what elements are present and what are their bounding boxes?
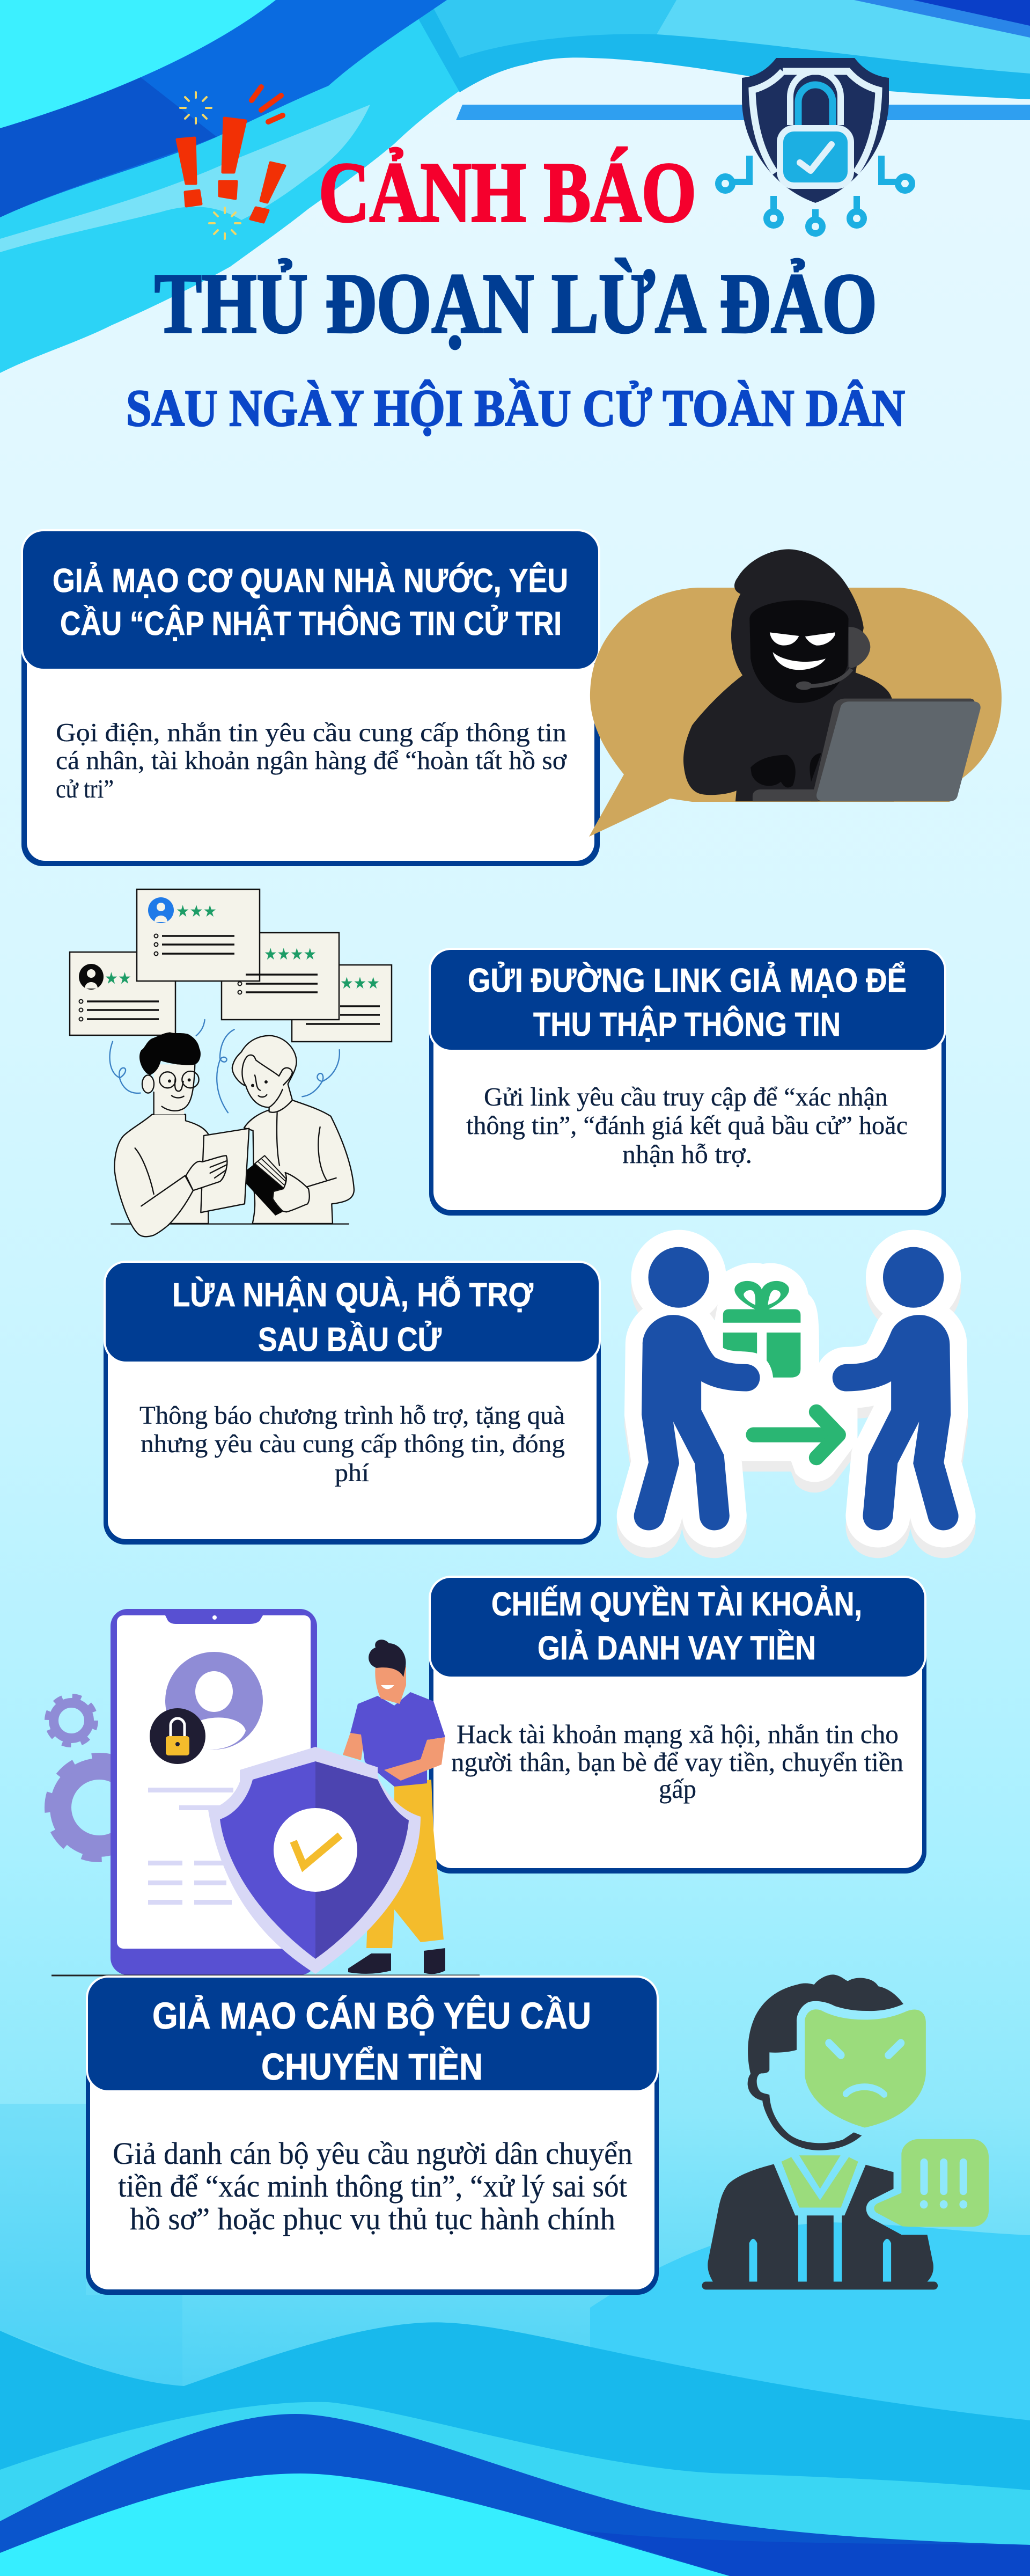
icon: phone, shield and man [48, 1609, 480, 1975]
right person [232, 1036, 354, 1224]
icon: hacker in speech bubble [589, 549, 1002, 837]
card 4 body text [451, 1719, 903, 1804]
card 4 body text: Hack tài khoản mạng xã hội, nhắn tin cho [457, 1719, 899, 1749]
card 4 heading [430, 1577, 925, 1678]
two people [634, 1247, 959, 1530]
padlock badge [150, 1708, 205, 1764]
card 2 body text: thông tin”, “đánh giá kết quả bầu cử” hoăc [466, 1110, 908, 1140]
card 1 body text: cử tri” [56, 774, 114, 803]
card 3 body text: Thông báo chương trình hỗ trợ, tặng quà [139, 1401, 565, 1430]
panel: card 1 [21, 530, 600, 866]
card 4 body text: gấp [659, 1774, 696, 1804]
man [343, 1640, 445, 1974]
card 2 body text: Gửi link yêu cầu truy cập để “xác nhận [484, 1082, 888, 1111]
icon: security shield with padlock [718, 58, 912, 233]
swirls [110, 1020, 340, 1113]
card 1 heading: GIẢ MẠO CƠ QUAN NHÀ NƯỚC, YÊU [53, 562, 568, 599]
card 5 body text [113, 2136, 632, 2236]
card 4 heading: CHIẾM QUYỀN TÀI KHOẢN, [491, 1586, 862, 1623]
card 4 body text: người thân, bạn bè để vay tiền, chuyển tiền [451, 1747, 903, 1777]
panel: card 4 [429, 1577, 926, 1874]
floor line [52, 1975, 480, 1976]
arrow [753, 1412, 838, 1458]
card 5 heading: CHUYỂN TIỀN [261, 2045, 483, 2088]
card 1 heading: CẦU “CẬP NHẬT THÔNG TIN CỬ TRI [60, 605, 562, 642]
card 2 heading [430, 949, 945, 1051]
card 2 body text [466, 1082, 908, 1169]
card 5 heading [87, 1977, 658, 2091]
card 3 body text: nhưng yêu càu cung cấp thông tin, đóng [141, 1430, 565, 1458]
sticker halo [634, 1247, 959, 1530]
panel: card 2 [429, 949, 946, 1216]
card 1 heading [22, 530, 599, 670]
icon: two people reading with review cards: ★★★★ [264, 945, 317, 964]
card 3 heading: SAU BẦU CỬ [258, 1321, 442, 1358]
card 3 body text [139, 1401, 565, 1487]
card 3 body text: phí [335, 1459, 369, 1487]
card 3 heading: LỪA NHẬN QUÀ, HỖ TRỢ [172, 1277, 533, 1314]
icon: two people reading with review cards: ★★★ [176, 902, 217, 921]
panel: card 3 [104, 1262, 601, 1545]
icon: two people reading with review cards: ★★★ [340, 974, 380, 993]
gears [48, 1697, 149, 1857]
card 5 body text: hồ sơ” hoặc phục vụ thủ tục hành chính [130, 2201, 615, 2236]
background waves: bottom [0, 2104, 1030, 2576]
tablet and hand [201, 1129, 249, 1212]
card 2 heading: GỬI ĐƯỜNG LINK GIẢ MẠO ĐỂ [468, 962, 907, 999]
shield [208, 1747, 421, 1974]
card 5 heading: GIẢ MẠO CÁN BỘ YÊU CẦU [152, 1994, 591, 2037]
profile badge [165, 1652, 263, 1750]
subtitle: SAU NGÀY HỘI BẦU CỬ TOÀN DÂN [126, 379, 905, 437]
gift [723, 1281, 800, 1378]
icon: handing over a gift [634, 1247, 959, 1541]
background waves: top [0, 0, 1030, 373]
title: CẢNH BÁO: CẢNH BÁO [319, 144, 696, 240]
card 2 heading: THU THẬP THÔNG TIN [533, 1006, 841, 1043]
text bars on phone [148, 1788, 233, 1905]
left person [114, 1064, 208, 1236]
title: THỦ ĐOẠN LỪA ĐẢO: THỦ ĐOẠN LỪA ĐẢO [154, 255, 877, 351]
review cards [70, 889, 392, 1042]
panel: card 5 [86, 1977, 659, 2295]
card 1 body text: cá nhân, tài khoản ngân hàng để “hoàn tất hồ sơ [56, 745, 567, 775]
icon: two people reading with review cards: ★★ [105, 969, 131, 988]
icon: two people reading with review cards [70, 889, 392, 1236]
card 4 heading: GIẢ DANH VAY TIỀN [538, 1630, 816, 1667]
card 3 heading [105, 1262, 600, 1363]
phone [111, 1609, 317, 1975]
sticker shadow [634, 1257, 959, 1541]
card 5 body text: Giả danh cán bộ yêu cầu người dân chuyển [113, 2136, 632, 2171]
card 2 body text: nhận hỗ trợ. [622, 1139, 752, 1169]
icon: red exclamation marks [177, 87, 285, 239]
icon: fraudster with green mask [702, 1974, 989, 2289]
book and hand [246, 1163, 286, 1216]
card 1 body text [56, 718, 567, 803]
card 1 body text: Gọi điện, nhắn tin yêu cầu cung cấp thông tin [56, 718, 566, 747]
card 5 body text: tiền để “xác minh thông tin”, “xử lý sai sót [118, 2169, 627, 2204]
